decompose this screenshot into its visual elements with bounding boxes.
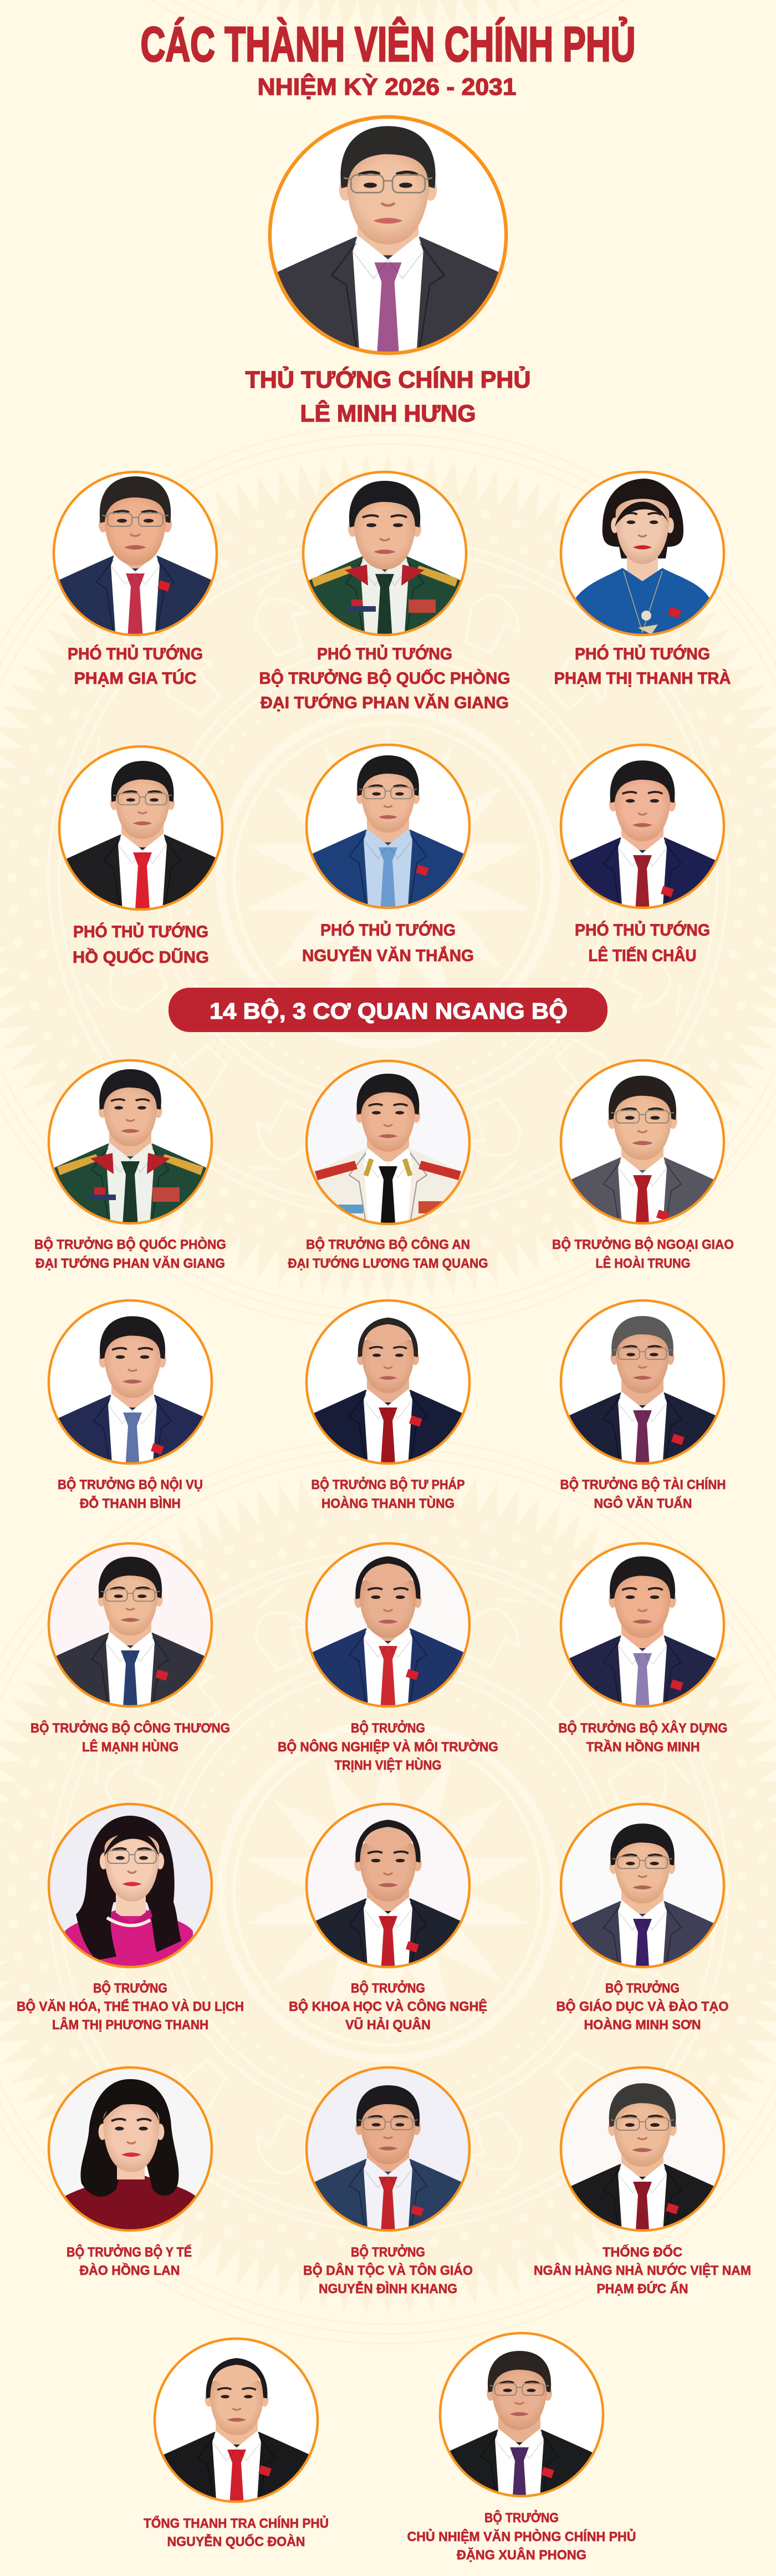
label: BỘ TRƯỞNG BỘ CÔNG THƯƠNG	[30, 1720, 230, 1736]
label: BỘ TRƯỞNG BỘ NGOẠI GIAO	[552, 1236, 734, 1252]
label: BỘ TRƯỞNG	[351, 1720, 425, 1736]
label	[289, 1980, 487, 2033]
portrait: Nguyễn Quốc Đoàn	[149, 2339, 324, 2564]
portrait: Vũ Hải Quân	[300, 1804, 476, 2030]
portrait: Hồ Quốc Dũng	[58, 745, 224, 911]
card: Bộ Tư pháp	[305, 1299, 471, 1508]
label	[407, 2509, 636, 2563]
label	[312, 1476, 464, 1511]
label	[278, 1720, 498, 1773]
label	[288, 1236, 488, 1271]
label: Thủ tướng Chính phủ Lê Minh Hưng: THỦ TƯỚNG CHÍNH PHỦ	[245, 366, 531, 393]
portrait: Phan Văn Giang in uniform	[302, 470, 468, 637]
label: ĐẠI TƯỚNG LƯƠNG TAM QUANG	[288, 1256, 488, 1271]
label: TRẦN HỒNG MINH	[586, 1739, 700, 1755]
label: NGÂN HÀNG NHÀ NƯỚC VIỆT NAM	[534, 2263, 751, 2278]
label	[534, 2244, 751, 2296]
label: PHÓ THỦ TƯỚNG	[320, 921, 456, 939]
label	[559, 1720, 727, 1755]
card: Bộ Xây dựng	[555, 1543, 730, 1767]
card: Bộ Dân tộc và Tôn giáo	[300, 2067, 476, 2296]
label	[303, 2244, 473, 2296]
label	[68, 644, 203, 688]
label: PHÓ THỦ TƯỚNG	[575, 644, 710, 663]
label: NGÔ VĂN TUẤN	[594, 1496, 692, 1511]
label	[73, 922, 209, 967]
card: Nguyễn Văn Thắng	[300, 745, 476, 965]
label	[557, 1980, 728, 2033]
label: ĐẶNG XUÂN PHONG	[457, 2547, 586, 2563]
card: Bộ Công Thương	[30, 1543, 230, 1765]
label	[259, 644, 510, 712]
label	[30, 1720, 230, 1755]
portrait: Trần Hồng Minh	[555, 1543, 730, 1767]
label: ĐÀO HỒNG LAN	[80, 2263, 180, 2278]
label	[302, 921, 474, 965]
label: BỘ TRƯỞNG BỘ QUỐC PHÒNG	[259, 669, 510, 688]
label: BỘ TRƯỞNG BỘ CÔNG AN	[306, 1236, 470, 1252]
label: HOÀNG THANH TÙNG	[321, 1496, 455, 1511]
label	[552, 1236, 734, 1271]
label: TỔNG THANH TRA CHÍNH PHỦ	[144, 2515, 329, 2531]
label	[67, 2244, 192, 2278]
label: PHÓ THỦ TƯỚNG	[73, 922, 208, 941]
label	[58, 1476, 203, 1511]
label: BỘ TRƯỞNG	[351, 2244, 425, 2260]
portrait: Nguyễn Đình Khang	[300, 2067, 476, 2291]
label: BỘ KHOA HỌC VÀ CÔNG NGHỆ	[289, 1999, 487, 2014]
label: ĐẠI TƯỚNG PHAN VĂN GIANG	[35, 1256, 225, 1271]
label: LÂM THỊ PHƯƠNG THANH	[52, 2017, 208, 2033]
card: Bộ Y tế	[49, 2067, 212, 2278]
portrait: Trịnh Việt Hùng	[300, 1543, 476, 1760]
label: BỘ VĂN HÓA, THỂ THAO VÀ DU LỊCH	[17, 1999, 244, 2014]
label: VŨ HẢI QUÂN	[345, 2016, 431, 2033]
label: PHÓ THỦ TƯỚNG	[68, 644, 203, 663]
card: Bộ Ngoại giao	[552, 1060, 734, 1289]
section banner: 14 bộ, 3 cơ quan ngang bộ	[169, 988, 607, 1032]
portrait: Đặng Xuân Phong	[432, 2333, 607, 2562]
label: ĐẠI TƯỚNG PHAN VĂN GIANG	[261, 693, 509, 712]
card: Lê Tiến Châu	[555, 745, 730, 969]
card: Bộ Giáo dục và Đào tạo	[555, 1804, 730, 2033]
label: BỘ TRƯỞNG BỘ XÂY DỰNG	[559, 1720, 727, 1736]
portrait: Ngô Văn Tuấn	[560, 1299, 725, 1465]
label: TRỊNH VIỆT HÙNG	[335, 1757, 441, 1773]
card: Phạm Gia Túc	[48, 472, 223, 688]
portrait: Nguyễn Văn Thắng	[305, 743, 471, 910]
card: Bộ Quốc phòng	[34, 1060, 226, 1276]
label: BỘ TRƯỞNG BỘ QUỐC PHÒNG	[34, 1236, 226, 1252]
portrait: Phan Văn Giang	[48, 1059, 213, 1225]
card: Ngân hàng Nhà nước	[534, 2067, 751, 2296]
portrait: Đỗ Thanh Bình	[48, 1299, 213, 1465]
portrait: Đào Hồng Lan	[49, 2067, 212, 2238]
label	[144, 2515, 329, 2549]
label: BỘ TRƯỞNG BỘ TÀI CHÍNH	[560, 1476, 726, 1492]
card: Bộ Nội vụ	[48, 1299, 213, 1508]
card: Bộ Văn hóa, Thể thao và Du lịch	[17, 1804, 244, 2033]
label: LÊ HOÀI TRUNG	[595, 1256, 691, 1271]
label	[554, 644, 731, 688]
label: PHẠM THỊ THANH TRÀ	[554, 669, 731, 688]
label: NGUYỄN QUỐC ĐOÀN	[167, 2533, 305, 2549]
label: BỘ TRƯỞNG	[484, 2509, 559, 2526]
card: Phạm Thị Thanh Trà	[554, 472, 731, 688]
label: CHỦ NHIỆM VĂN PHÒNG CHÍNH PHỦ	[407, 2528, 636, 2544]
label: HỒ QUỐC DŨNG	[73, 948, 209, 967]
card: Bộ Khoa học và Công nghệ	[289, 1804, 487, 2033]
label	[560, 1476, 726, 1511]
label: PHẠM ĐỨC ẤN	[596, 2281, 688, 2296]
label: HOÀNG MINH SƠN	[584, 2017, 701, 2033]
portrait: Hoàng Thanh Tùng	[305, 1299, 471, 1465]
portrait: Lê Hoài Trung	[560, 1059, 725, 1225]
card: Tổng Thanh tra	[144, 2339, 329, 2564]
card: Hồ Quốc Dũng	[55, 746, 230, 967]
label: BỘ TRƯỞNG BỘ Y TẾ	[67, 2244, 192, 2260]
label: BỘ GIÁO DỤC VÀ ĐÀO TẠO	[557, 1999, 728, 2014]
label: THỐNG ĐỐC	[603, 2244, 682, 2260]
portrait: Phạm Đức Ấn	[555, 2067, 730, 2296]
portrait: Lê Mạnh Hùng	[43, 1543, 218, 1765]
subtitle: NHIỆM KỲ 2026 - 2031	[257, 73, 517, 100]
portrait: Hoàng Minh Sơn	[555, 1804, 730, 2033]
label: PHÓ THỦ TƯỚNG	[317, 644, 452, 663]
portrait: Lâm Thị Phương Thanh	[49, 1804, 212, 1974]
portrait: Lê Minh Hưng	[268, 115, 508, 355]
label: NGUYỄN VĂN THẮNG	[302, 946, 474, 965]
label: BỘ TRƯỞNG BỘ NỘI VỤ	[58, 1476, 203, 1492]
label: BỘ TRƯỞNG	[351, 1980, 425, 1996]
label: PHẠM GIA TÚC	[74, 669, 196, 688]
label: LÊ TIẾN CHÂU	[589, 946, 696, 965]
card: Bộ Nông nghiệp và Môi trường	[278, 1543, 498, 1773]
section banner: 14 bộ, 3 cơ quan ngang bộ: 14 BỘ, 3 CƠ QUAN NGANG BỘ	[210, 998, 568, 1024]
portrait: Phạm Thị Thanh Trà	[560, 470, 725, 637]
label: ĐỖ THANH BÌNH	[80, 1495, 181, 1511]
portrait: Lê Tiến Châu	[560, 743, 725, 910]
label: BỘ TRƯỞNG	[605, 1980, 680, 1996]
label: BỘ TRƯỞNG BỘ TƯ PHÁP	[312, 1476, 464, 1492]
label: LÊ MẠNH HÙNG	[82, 1739, 178, 1755]
label: BỘ DÂN TỘC VÀ TÔN GIÁO	[303, 2263, 473, 2278]
card: Phan Văn Giang (deputy)	[259, 472, 510, 712]
label: BỘ TRƯỞNG	[93, 1980, 167, 1996]
label: PHÓ THỦ TƯỚNG	[575, 921, 710, 939]
card: Thủ tướng Lê Minh Hưng	[245, 117, 531, 428]
portrait: Lương Tam Quang	[305, 1059, 471, 1226]
label	[34, 1236, 226, 1271]
label	[17, 1980, 244, 2033]
label: NGUYỄN ĐÌNH KHANG	[319, 2280, 457, 2296]
label: Thủ tướng Chính phủ Lê Minh Hưng	[245, 366, 531, 427]
label: BỘ NÔNG NGHIỆP VÀ MÔI TRƯỜNG	[278, 1739, 498, 1755]
label	[575, 921, 710, 965]
label: Thủ tướng Chính phủ Lê Minh Hưng: LÊ MINH HƯNG	[300, 400, 476, 427]
card: Bộ Công an	[288, 1061, 488, 1281]
card: Bộ Tài chính	[560, 1299, 725, 1508]
card: Văn phòng Chính phủ	[407, 2333, 636, 2563]
portrait: Phạm Gia Túc	[52, 470, 218, 637]
